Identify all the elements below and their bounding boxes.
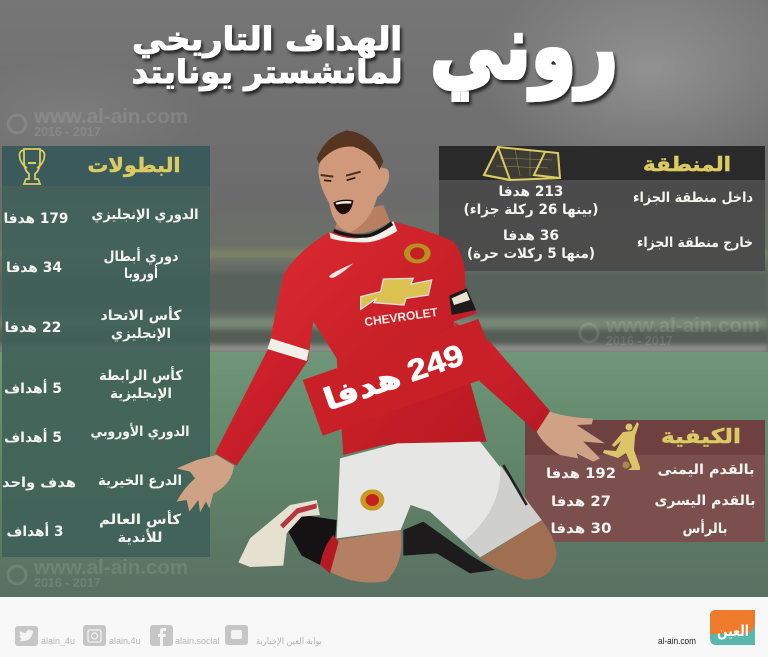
player photo [177,130,605,583]
heading: area: المنطقة [643,152,731,176]
watermark middle right [580,314,760,348]
captain armband [449,288,476,315]
watermark top left: 2016 - 2017 [34,125,101,139]
sponsor text: CHEVROLET [363,305,439,329]
row: outside the box: خارج منطقة الجزاء [637,235,753,251]
row: FA Cup: الإنجليزي [111,326,171,343]
row: League Cup: كأس الرابطة [99,366,184,384]
row: FA Cup: كأس الاتحاد [100,306,182,324]
icon: instagram [83,625,106,646]
title: line 1: الهداف التاريخي [132,20,402,58]
row: Europa League: الدوري الأوروبي [90,423,190,441]
row: right foot: 192 هدفا [546,466,616,482]
row: Premier League [3,207,198,227]
title [132,0,618,101]
row: Champions League [6,247,178,282]
left cuff stripe [267,338,309,361]
icon: footballer [603,422,640,470]
watermark middle right: www.al-ain.com [605,314,760,337]
row: left foot: 27 هدفا [551,494,611,510]
eyes and brows [321,172,361,177]
row: inside the box: داخل منطقة الجزاء [633,190,753,206]
left sleeve [215,348,308,466]
icon: goal [484,147,560,180]
row: Premier League: 179 هدفا [3,211,68,227]
label: instagram: alain.4u [109,636,141,646]
row: League Cup [4,366,184,402]
row: Community Shield: هدف واحد [2,475,76,491]
row: Club World Cup [6,510,182,546]
crest on shorts [360,489,384,511]
head [318,143,389,232]
neck [335,205,390,234]
banner text: 249 هدفا [320,339,468,417]
row: right foot: بالقدم اليمنى [658,462,754,478]
row: outside the box: 36 هدفا [503,228,559,244]
row: Club World Cup: للأندية [118,529,162,546]
row: inside the box: 213 هدفا [498,184,564,200]
nike swoosh [329,263,353,278]
panel: how [525,420,765,542]
row: outside the box: (منها 5 ركلات حرة) [467,246,595,262]
watermark bottom left: 2016 - 2017 [34,576,101,590]
crest on shirt [404,243,431,263]
row: League Cup: الإنجليزية [110,386,172,402]
watermark top left [8,105,188,139]
watermark top left: www.al-ain.com [33,105,188,128]
row: Champions League: 34 هدفا [6,260,62,276]
label: facebook: alain.social [175,636,220,646]
banner: total goals [303,319,499,436]
heading: tournaments: البطولات [88,153,180,177]
logo [710,610,755,645]
watermark middle right: 2016 - 2017 [606,334,673,348]
row: header [550,519,728,537]
jersey [268,222,487,455]
watermark bottom left: www.al-ain.com [33,556,188,579]
row: inside the box [464,184,753,218]
row: Club World Cup: كأس العالم [99,510,182,528]
row: left foot [551,493,756,510]
row: Champions League: دوري أبطال [104,247,178,266]
row: left foot: بالقدم اليسرى [654,493,756,509]
icon: trophy [20,149,44,184]
site address: al-ain.com [658,636,696,646]
panel: area [439,146,765,271]
row: Champions League: أوروبا [124,264,158,282]
left leg [403,522,495,573]
icon: facebook [150,625,173,646]
boot [238,500,320,567]
panel header: how [525,420,765,455]
row: Community Shield: الدرع الخيرية [98,473,182,489]
row: header: بالرأس [682,519,728,537]
row: FA Cup [4,306,182,343]
row: Europa League [4,423,190,446]
row: League Cup: 5 أهداف [4,379,62,397]
title: line 2: لمانشستر يونايتد [132,53,402,91]
row: header: 30 هدفا [550,521,612,537]
sponsor logo [361,278,432,309]
label: twitter: alain_4u [41,636,75,646]
row: right foot [546,462,754,482]
label: youtube: بوابة العين الإخبارية [256,636,322,647]
footer [0,597,768,657]
mouth [333,200,353,214]
row: Premier League: الدوري الإنجليزي [92,207,198,224]
hair [317,130,383,170]
shorts [337,442,542,557]
right sleeve [453,322,550,432]
panel header: tournaments [2,146,210,186]
collar [329,221,397,242]
heading: how: الكيفية [661,424,741,448]
row: inside the box: (بينها 26 ركلة جزاء) [464,202,598,218]
right hand [537,412,605,462]
row: outside the box [467,228,753,262]
panel header: area [439,146,765,180]
sock [287,515,337,565]
panel: tournaments [2,146,210,557]
row: FA Cup: 22 هدفا [4,320,61,336]
row: Community Shield [2,473,182,491]
row: Europa League: 5 أهداف [4,428,62,446]
logo: العين [717,622,749,640]
left hand [177,455,234,512]
row: Club World Cup: 3 أهداف [6,522,64,540]
icon: twitter [15,626,38,646]
icon: youtube [225,625,248,645]
watermark bottom left [8,556,188,590]
right thigh [330,530,401,583]
